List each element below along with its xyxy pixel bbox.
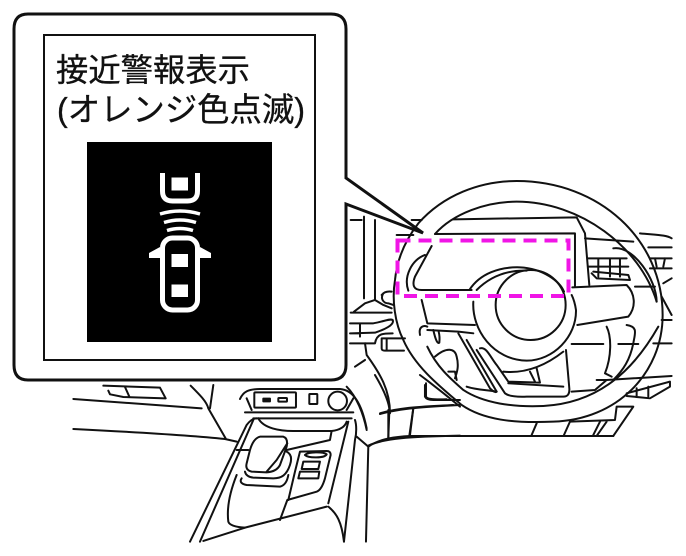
callout bubble xyxy=(14,14,423,380)
inner frame xyxy=(44,35,315,360)
USB port and switch panel xyxy=(240,389,367,428)
steering wheel rim xyxy=(394,181,663,422)
dashboard and steering wheel line drawing xyxy=(347,181,672,447)
magenta dashed highlight: display location xyxy=(398,240,568,296)
instrument cluster hood xyxy=(407,217,589,291)
vents at right of cluster xyxy=(585,233,672,320)
center console line drawing xyxy=(73,375,460,542)
icon panel: approach warning xyxy=(87,142,272,342)
left door trim xyxy=(73,385,237,442)
icon: own vehicle xyxy=(149,238,211,310)
icon: proximity waves xyxy=(160,211,200,230)
left side of dash xyxy=(351,217,422,300)
title: warning display: 接近警報表示 xyxy=(56,52,250,88)
right console trim xyxy=(375,375,460,412)
lower right trim xyxy=(570,376,672,436)
subtitle: orange flashing: (オレンジ色点滅) xyxy=(57,91,305,128)
icon: vehicle ahead xyxy=(162,173,198,201)
steering wheel spokes and switches xyxy=(422,285,634,333)
steering hub xyxy=(469,267,576,361)
shift lever and console xyxy=(190,405,460,542)
